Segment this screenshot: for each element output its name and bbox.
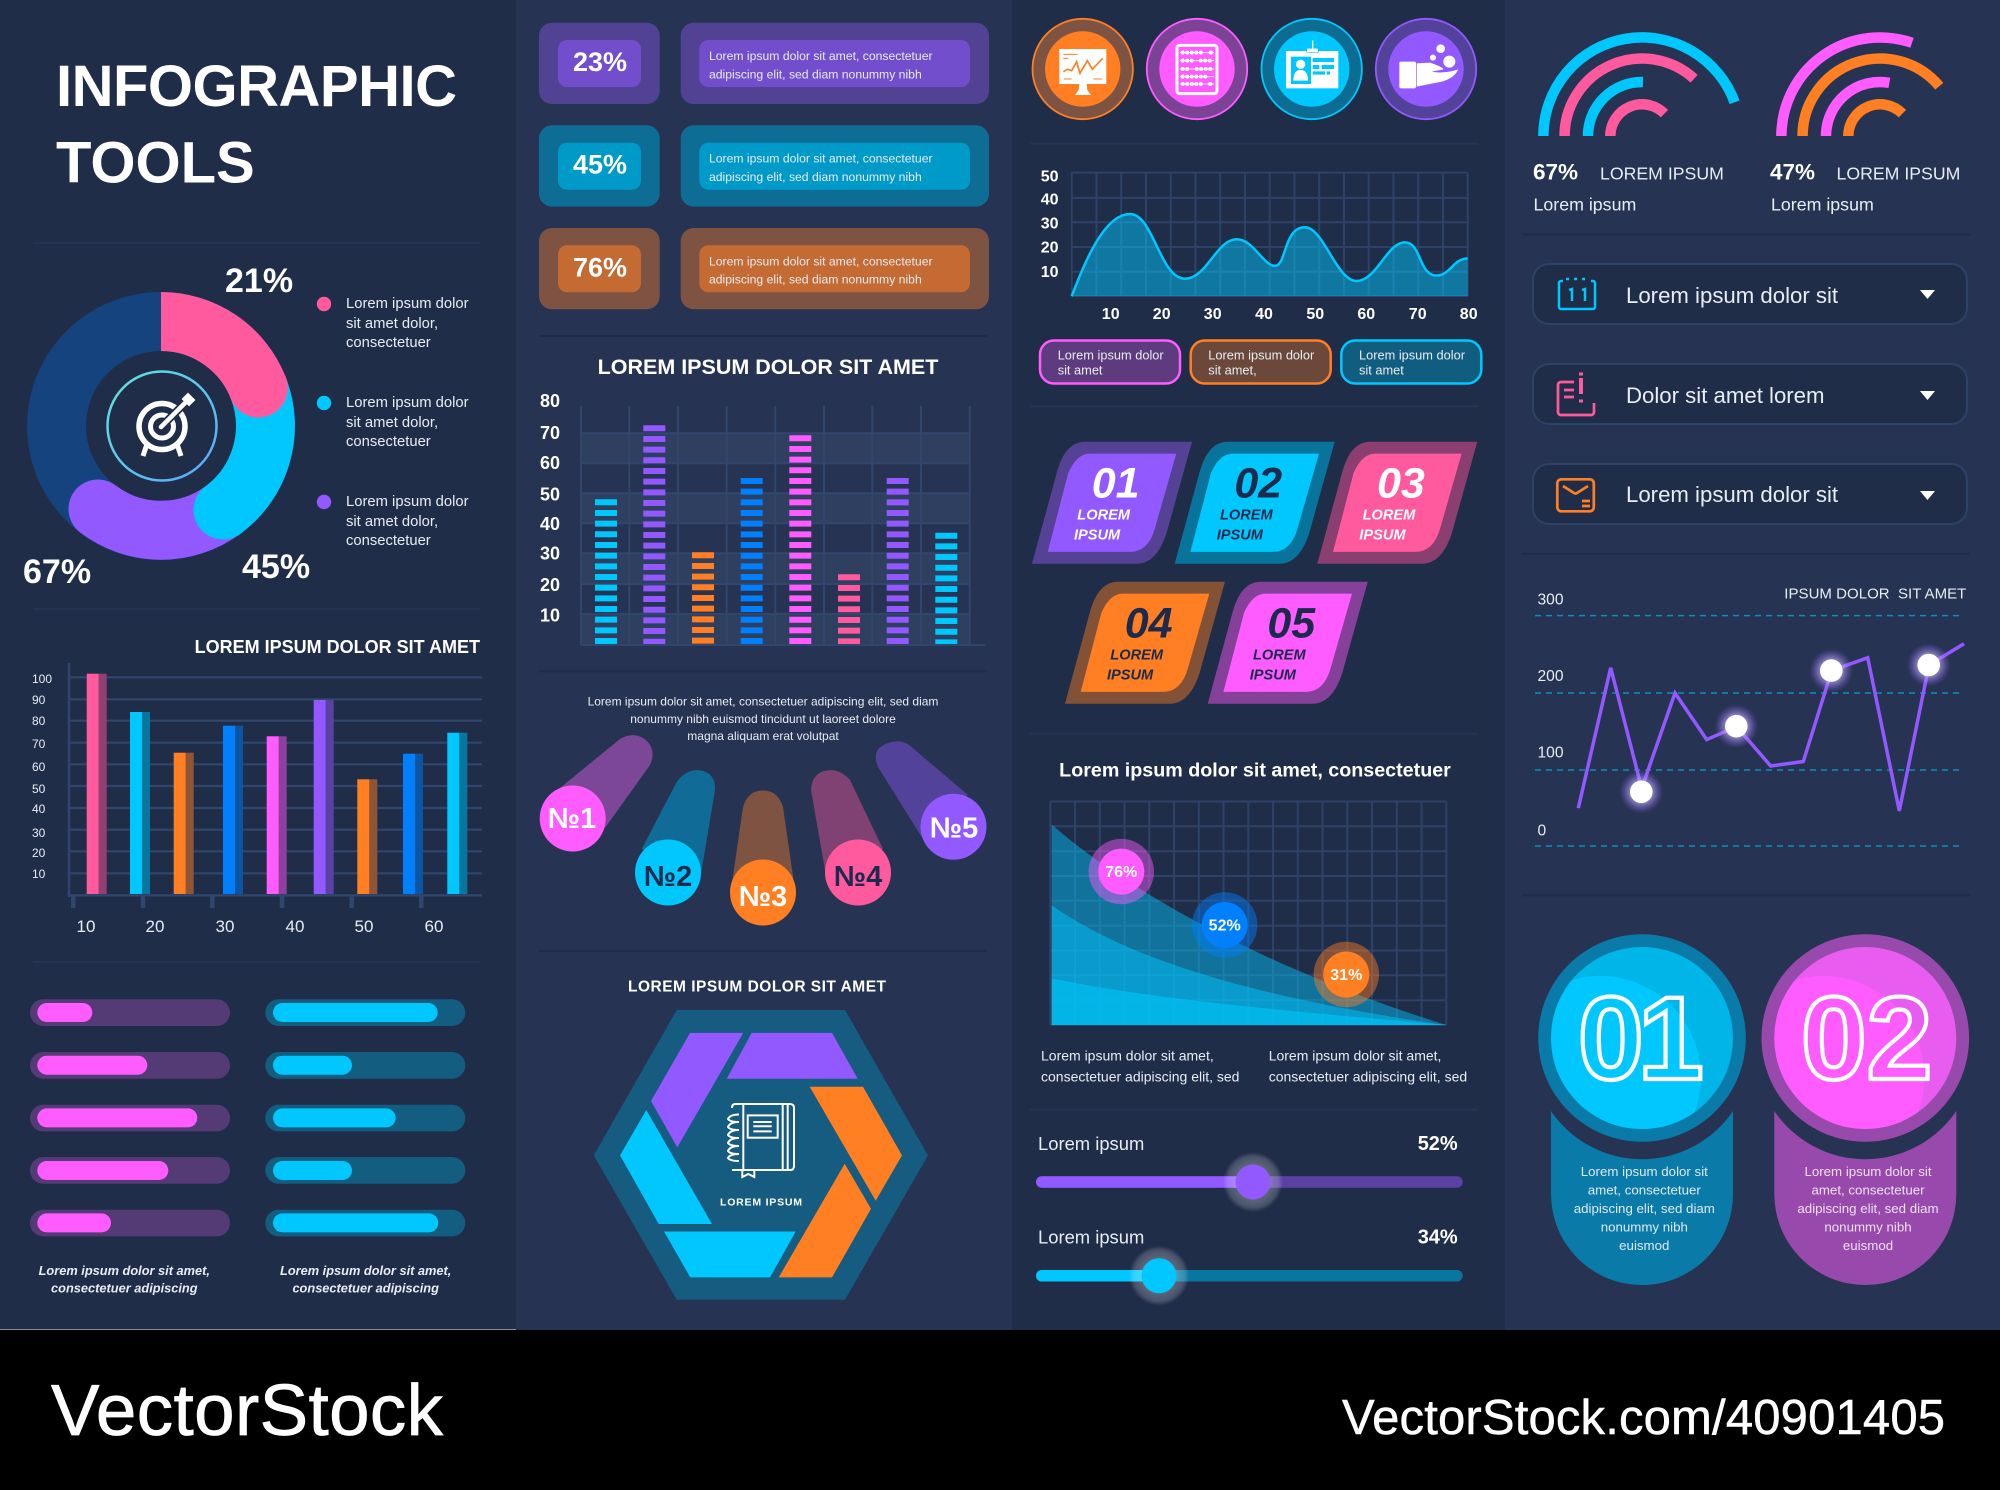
- bubble 52%: [1192, 892, 1257, 958]
- slider 34%: 34%: [1418, 1226, 1458, 1248]
- line chart: column 4: [1535, 586, 1966, 846]
- badge 02: IPSUM: [1217, 528, 1264, 544]
- hexagon label: LOREM IPSUM: [720, 1196, 802, 1208]
- y axis labels: 80: [540, 391, 560, 411]
- y axis labels: [32, 672, 52, 881]
- y axis labels: 70: [540, 423, 560, 443]
- y axis labels: 50: [1041, 168, 1059, 185]
- y axis labels: 10: [1041, 264, 1059, 281]
- text block: tube section intro: magna aliquam erat volutpat: [687, 729, 839, 743]
- y axis labels: 30: [1041, 216, 1059, 233]
- chart captions: [1041, 1048, 1467, 1085]
- y axis labels: 50: [32, 782, 46, 796]
- gauge labels: 47%: [1770, 160, 1815, 185]
- stat row: 45%: [539, 125, 989, 207]
- x axis labels: 10: [1102, 306, 1120, 323]
- gauge labels: Lorem ipsum: [1771, 194, 1874, 214]
- progress captions: Lorem ipsum dolor sit amet,: [39, 1263, 210, 1278]
- y axis labels: 30: [32, 826, 46, 840]
- panel: column 1 background: [0, 0, 516, 1330]
- stat row: 76%: 76%: [573, 252, 627, 282]
- dropdown 1: [1533, 264, 1967, 324]
- tube 4: №4: [834, 861, 882, 893]
- legend pills: Lorem ipsum dolor: [1359, 348, 1466, 362]
- chart captions: Lorem ipsum dolor sit amet,: [1269, 1048, 1441, 1064]
- donut percentage labels: 67%: [23, 553, 91, 591]
- stat row: 45%: adipiscing elit, sed diam nonummy nibh: [709, 170, 922, 184]
- card text: Lorem ipsum dolor sit: [1804, 1164, 1932, 1179]
- badge 02: [1175, 442, 1335, 564]
- icon badge: id card: [1262, 19, 1362, 119]
- legend pills: sit amet,: [1208, 363, 1257, 378]
- x axis labels: 80: [1460, 306, 1478, 323]
- gauge labels: 67%: [1533, 160, 1578, 185]
- donut legend: consectetuer: [346, 434, 431, 450]
- progress captions: [39, 1263, 451, 1296]
- y axis labels: [540, 391, 560, 626]
- badge 05: LOREM: [1253, 648, 1307, 664]
- slider 52%: 52%: [1418, 1133, 1458, 1155]
- gauge labels: [1533, 160, 1960, 214]
- slider 52%: Lorem ipsum: [1038, 1133, 1144, 1154]
- donut legend: [317, 296, 469, 549]
- numbered card 02: [1762, 934, 1970, 1285]
- stat row: 23%: [539, 23, 989, 104]
- donut legend: Lorem ipsum dolor: [346, 395, 469, 411]
- y axis labels: 80: [32, 714, 46, 728]
- badge 01: LOREM: [1077, 508, 1131, 524]
- numbered card 01: [1538, 934, 1746, 1285]
- badge 05: [1208, 582, 1368, 704]
- heading: layered area chart: Lorem ipsum dolor sit amet, consectetuer: [1059, 760, 1451, 782]
- y axis labels: [1041, 168, 1059, 281]
- donut legend: consectetuer: [346, 533, 431, 549]
- stat row: 23%: 23%: [573, 47, 627, 77]
- layered area chart: [1050, 802, 1446, 1025]
- card text: adipiscing elit, sed diam: [1574, 1201, 1715, 1216]
- x axis labels: 40: [286, 917, 304, 936]
- icon badge: abacus: [1147, 19, 1247, 119]
- badge 01: 01: [1092, 459, 1140, 507]
- y axis labels: 40: [1041, 191, 1059, 208]
- bubble 31%: 31%: [1330, 967, 1362, 984]
- y axis labels: 100: [32, 672, 52, 686]
- stat row: 76%: adipiscing elit, sed diam nonummy nibh: [709, 273, 922, 287]
- y axis labels: 20: [1041, 240, 1059, 256]
- progress captions: consectetuer adipiscing: [292, 1281, 439, 1296]
- badge 05: IPSUM: [1250, 668, 1297, 684]
- chart labels: 300: [1538, 592, 1564, 608]
- title: TOOLS: [56, 130, 255, 196]
- gauge labels: LOREM IPSUM: [1600, 164, 1724, 184]
- footer url: VectorStock.com/40901405: [1342, 1391, 1945, 1445]
- x axis labels: 30: [216, 917, 234, 936]
- icon: calendar: [1559, 279, 1595, 309]
- badge 04: LOREM: [1110, 648, 1164, 664]
- text block: tube section intro: [588, 694, 938, 743]
- text block: tube section intro: nonummy nibh euismod tincidunt ut laoreet dolore: [630, 712, 896, 726]
- x axis labels: 50: [1306, 306, 1324, 323]
- badge 04: IPSUM: [1107, 668, 1154, 684]
- legend pills: Lorem ipsum dolor: [1208, 348, 1315, 362]
- slider 52%: [1036, 1133, 1463, 1212]
- y axis labels: 10: [540, 606, 560, 626]
- bubble 52%: 52%: [1209, 918, 1241, 934]
- y axis labels: 20: [32, 846, 46, 860]
- badge 05: 05: [1267, 599, 1316, 647]
- chart labels: 200: [1538, 668, 1564, 685]
- badge 04: [1065, 582, 1225, 704]
- donut percentage labels: 45%: [242, 548, 310, 586]
- dropdown 2: Dolor sit amet lorem: [1626, 383, 1825, 408]
- bubble 31%: [1314, 942, 1379, 1007]
- card text: adipiscing elit, sed diam: [1797, 1201, 1939, 1216]
- y axis labels: 60: [32, 760, 46, 774]
- x axis labels: [1102, 306, 1478, 323]
- icon badge: monitor: [1032, 19, 1133, 119]
- x axis labels: 40: [1255, 306, 1273, 323]
- legend pills: [1040, 340, 1481, 384]
- chart captions: Lorem ipsum dolor sit amet,: [1041, 1048, 1214, 1064]
- card text: Lorem ipsum dolor sit: [1581, 1164, 1708, 1179]
- chart heading: LOREM IPSUM DOLOR SIT AMET: [598, 355, 938, 379]
- y axis labels: 90: [32, 693, 46, 707]
- badge 03: IPSUM: [1359, 528, 1406, 544]
- badge 03: LOREM: [1363, 508, 1416, 524]
- y axis labels: 30: [540, 544, 560, 564]
- title: INFOGRAPHIC: [56, 54, 457, 119]
- dropdown 2: [1533, 364, 1967, 424]
- tube 1: №1: [548, 803, 596, 835]
- y axis labels: 70: [32, 737, 46, 751]
- card text: amet, consectetuer: [1588, 1183, 1701, 1198]
- y axis labels: 10: [32, 867, 46, 881]
- icon: notebook: [728, 1104, 794, 1177]
- badge 03: 03: [1377, 459, 1425, 507]
- icon: note: [1558, 374, 1594, 415]
- icon badge: hand with coins: [1376, 19, 1476, 119]
- card text: euismod: [1619, 1238, 1669, 1253]
- stat row: 23%: Lorem ipsum dolor sit amet, consectetuer: [709, 49, 933, 63]
- dropdown 3: [1533, 464, 1967, 524]
- x axis labels: 10: [77, 917, 95, 936]
- text block: tube section intro: Lorem ipsum dolor sit amet, consectetuer adipiscing elit, sed diam: [588, 694, 938, 708]
- bubble 76%: [1089, 839, 1154, 904]
- x axis labels: 20: [146, 917, 164, 936]
- x axis labels: 30: [1204, 306, 1222, 323]
- stat row: 45%: 45%: [573, 150, 627, 180]
- chart heading: LOREM IPSUM DOLOR SIT AMET: [195, 637, 480, 657]
- dropdown 3: Lorem ipsum dolor sit: [1626, 482, 1838, 507]
- y axis labels: 40: [32, 802, 46, 816]
- badge 04: 04: [1125, 599, 1173, 647]
- donut chart: [56, 322, 288, 530]
- donut percentage labels: [23, 262, 310, 591]
- bubble 76%: 76%: [1105, 864, 1137, 881]
- y axis labels: 50: [540, 484, 560, 504]
- footer logo: VectorStock: [51, 1370, 444, 1451]
- gauge labels: LOREM IPSUM: [1836, 164, 1960, 184]
- x axis labels: 50: [355, 917, 373, 936]
- card text: nonummy nibh: [1601, 1220, 1688, 1235]
- tube 5: №5: [930, 813, 978, 845]
- chart captions: consectetuer adipiscing elit, sed: [1269, 1069, 1467, 1085]
- dropdown 1: Lorem ipsum dolor sit: [1626, 283, 1838, 308]
- legend pills: sit amet: [1058, 363, 1103, 378]
- tube 3: №3: [739, 881, 787, 913]
- stat row: 76%: [539, 228, 989, 309]
- chart labels: [1538, 586, 1966, 840]
- badge 01: IPSUM: [1074, 528, 1121, 544]
- stat row: 76%: Lorem ipsum dolor sit amet, consectetuer: [709, 254, 933, 268]
- badge 02: LOREM: [1220, 508, 1274, 524]
- x axis labels: [77, 917, 443, 936]
- footer bar: [0, 1330, 2000, 1490]
- card text: [1797, 1164, 1939, 1253]
- card text: nonummy nibh: [1824, 1220, 1912, 1235]
- donut legend: sit amet dolor,: [346, 514, 438, 530]
- donut legend: Lorem ipsum dolor: [346, 494, 469, 510]
- donut legend: sit amet dolor,: [346, 415, 438, 431]
- chart captions: consectetuer adipiscing elit, sed: [1041, 1069, 1239, 1085]
- donut legend: sit amet dolor,: [346, 316, 438, 332]
- slider 34%: Lorem ipsum: [1038, 1226, 1144, 1248]
- tube 3: [730, 790, 796, 926]
- y axis labels: 20: [540, 575, 560, 595]
- panel: column 3 background: [1012, 0, 1505, 1330]
- slider 34%: [1036, 1226, 1463, 1306]
- tube 2: [635, 770, 715, 906]
- badge 03: [1317, 442, 1477, 564]
- badge 01: [1032, 442, 1192, 564]
- numbered card 02: 02: [1801, 973, 1932, 1105]
- badge 02: 02: [1234, 459, 1282, 507]
- panel: column 4 background: [1505, 0, 2000, 1330]
- y axis labels: 60: [540, 453, 560, 473]
- title: [56, 54, 457, 196]
- progress bars: cyan: [265, 999, 465, 1236]
- numbered card 01: 01: [1578, 973, 1704, 1105]
- tube 1: [540, 735, 653, 852]
- donut legend: consectetuer: [346, 335, 431, 351]
- radial gauge right: [1781, 37, 1939, 136]
- x axis labels: 70: [1409, 306, 1427, 323]
- icon: mail: [1557, 479, 1594, 511]
- y axis labels: 40: [540, 514, 560, 534]
- card text: euismod: [1843, 1238, 1893, 1253]
- x axis labels: 60: [1357, 306, 1375, 323]
- icon: target with arrow: [139, 394, 194, 456]
- legend pills: Lorem ipsum dolor: [1058, 348, 1164, 362]
- chart labels: 0: [1538, 822, 1546, 840]
- progress captions: consectetuer adipiscing: [51, 1281, 198, 1296]
- progress captions: Lorem ipsum dolor sit amet,: [280, 1263, 451, 1278]
- tube 5: [876, 741, 986, 860]
- panel: column 2 background: [516, 0, 1012, 1330]
- progress bars: magenta: [30, 999, 230, 1236]
- stat row: 45%: Lorem ipsum dolor sit amet, consectetuer: [709, 152, 933, 166]
- chart labels: IPSUM DOLOR SIT AMET: [1784, 586, 1966, 602]
- radial gauge left: [1543, 37, 1735, 136]
- x axis labels: 60: [425, 917, 443, 936]
- bar chart: column 1: [32, 637, 482, 936]
- donut legend: Lorem ipsum dolor: [346, 296, 469, 312]
- tube 2: №2: [644, 861, 692, 893]
- hexagon diagram: [594, 1010, 928, 1300]
- stat row: 23%: adipiscing elit, sed diam nonummy nibh: [709, 67, 922, 81]
- chart labels: 100: [1538, 745, 1564, 762]
- legend pills: sit amet: [1359, 363, 1404, 378]
- segmented bar chart: [540, 355, 985, 645]
- heading: hexagon: LOREM IPSUM DOLOR SIT AMET: [628, 979, 887, 996]
- card text: [1574, 1164, 1715, 1253]
- tube 4: [811, 770, 891, 906]
- area line chart: [1041, 168, 1478, 323]
- donut percentage labels: 21%: [225, 262, 293, 300]
- gauge labels: Lorem ipsum: [1534, 194, 1636, 214]
- x axis labels: 20: [1153, 306, 1171, 323]
- card text: amet, consectetuer: [1811, 1183, 1925, 1198]
